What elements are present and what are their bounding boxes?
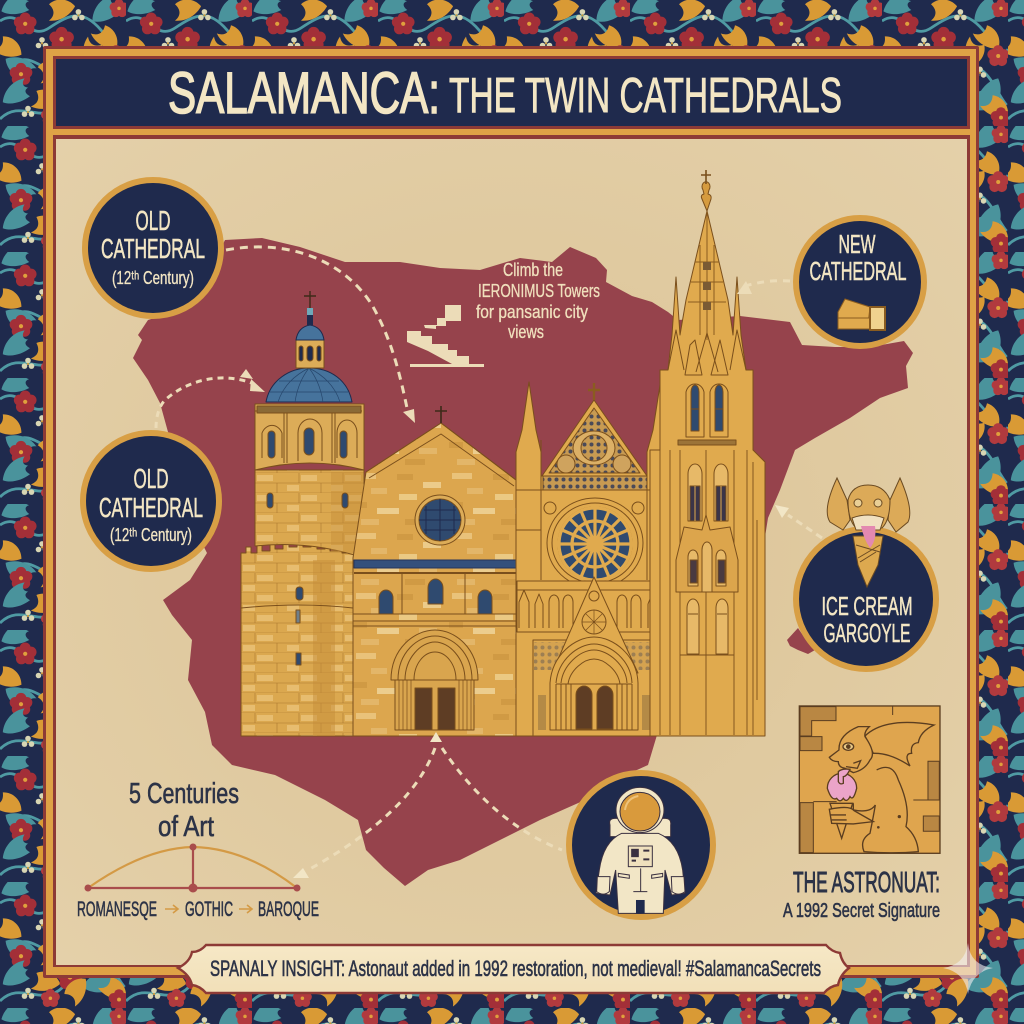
arrow: [165, 905, 178, 913]
callout: ice cream gargoyle: ICE CREAM: [822, 591, 912, 621]
rose window: [547, 498, 643, 588]
dashed arrow: old cathedral to nave: [226, 247, 415, 423]
centuries heading: 5 Centuries: [129, 778, 239, 810]
centuries heading: [129, 778, 239, 843]
timeline chart: [77, 844, 319, 921]
icon: staircase: [407, 305, 484, 367]
parchment panel: [56, 139, 967, 965]
cathedral illustration: [241, 170, 765, 736]
timeline chart: GOTHIC: [185, 898, 233, 921]
gothic facade: [516, 382, 660, 736]
arrow: new cathedral to spire: [737, 281, 790, 294]
arrow: [239, 905, 252, 913]
centuries heading: of Art: [158, 811, 214, 843]
dome: [266, 368, 352, 402]
climb note: IERONIMUS Towers: [478, 281, 600, 301]
callout: old cathedral bottom: CATHEDRAL: [99, 492, 203, 523]
callout: ice cream gargoyle: [796, 478, 936, 669]
sparkle watermark: [943, 943, 993, 994]
romanesque portal: [391, 630, 478, 680]
callout: old cathedral top: (12ᵗʰ Century): [112, 268, 194, 288]
arrow: portal to astronaut: [442, 748, 562, 850]
climb note: views: [508, 322, 544, 342]
icon: gargoyle head: [827, 478, 910, 587]
astronaut badge: [569, 773, 713, 917]
callout: old cathedral bottom: [83, 433, 219, 569]
map of Spain: [133, 238, 913, 886]
callout: ice cream gargoyle: GARGOYLE: [824, 618, 910, 648]
gargoyle relief panel: [799, 706, 940, 853]
icon: astronaut: [596, 787, 685, 913]
timeline chart: BAROQUE: [258, 898, 319, 921]
astronaut caption: [783, 867, 940, 922]
old cathedral tower: [241, 291, 364, 736]
callout: old cathedral bottom: (12ᵗʰ Century): [110, 525, 192, 545]
timeline chart: ROMANESQE: [77, 898, 157, 921]
icon: tickets: [838, 299, 885, 330]
old cathedral nave: [353, 406, 516, 736]
callout: old cathedral top: OLD: [136, 205, 170, 236]
astronaut caption: A 1992 Secret Signature: [783, 900, 940, 922]
arrow: portal to timeline: [293, 732, 442, 878]
gothic arcade: [517, 581, 660, 632]
gothic portal: [550, 637, 638, 730]
climb note: [476, 260, 600, 342]
climb note: Climb the: [503, 260, 563, 280]
new cathedral tower: [650, 170, 765, 736]
subheading: THE TWIN CATHEDRALS: [449, 69, 842, 123]
callout: new cathedral: CATHEDRAL: [810, 256, 906, 286]
map fragment: [787, 628, 815, 654]
callout: old cathedral bottom: OLD: [134, 463, 168, 494]
callout: new cathedral: NEW: [838, 229, 876, 259]
insight banner: [178, 945, 849, 993]
dashed arrow: old cathedral to dome: [156, 369, 265, 428]
climb note: for pansanic city: [476, 302, 588, 322]
callout: old cathedral top: [85, 180, 221, 316]
title bar: [46, 59, 976, 139]
callout: old cathedral top: CATHEDRAL: [101, 233, 205, 264]
callout: new cathedral: [796, 218, 924, 346]
heading: SALAMANCA:: [168, 61, 440, 126]
arrow: gargoyle to tower: [775, 505, 822, 538]
